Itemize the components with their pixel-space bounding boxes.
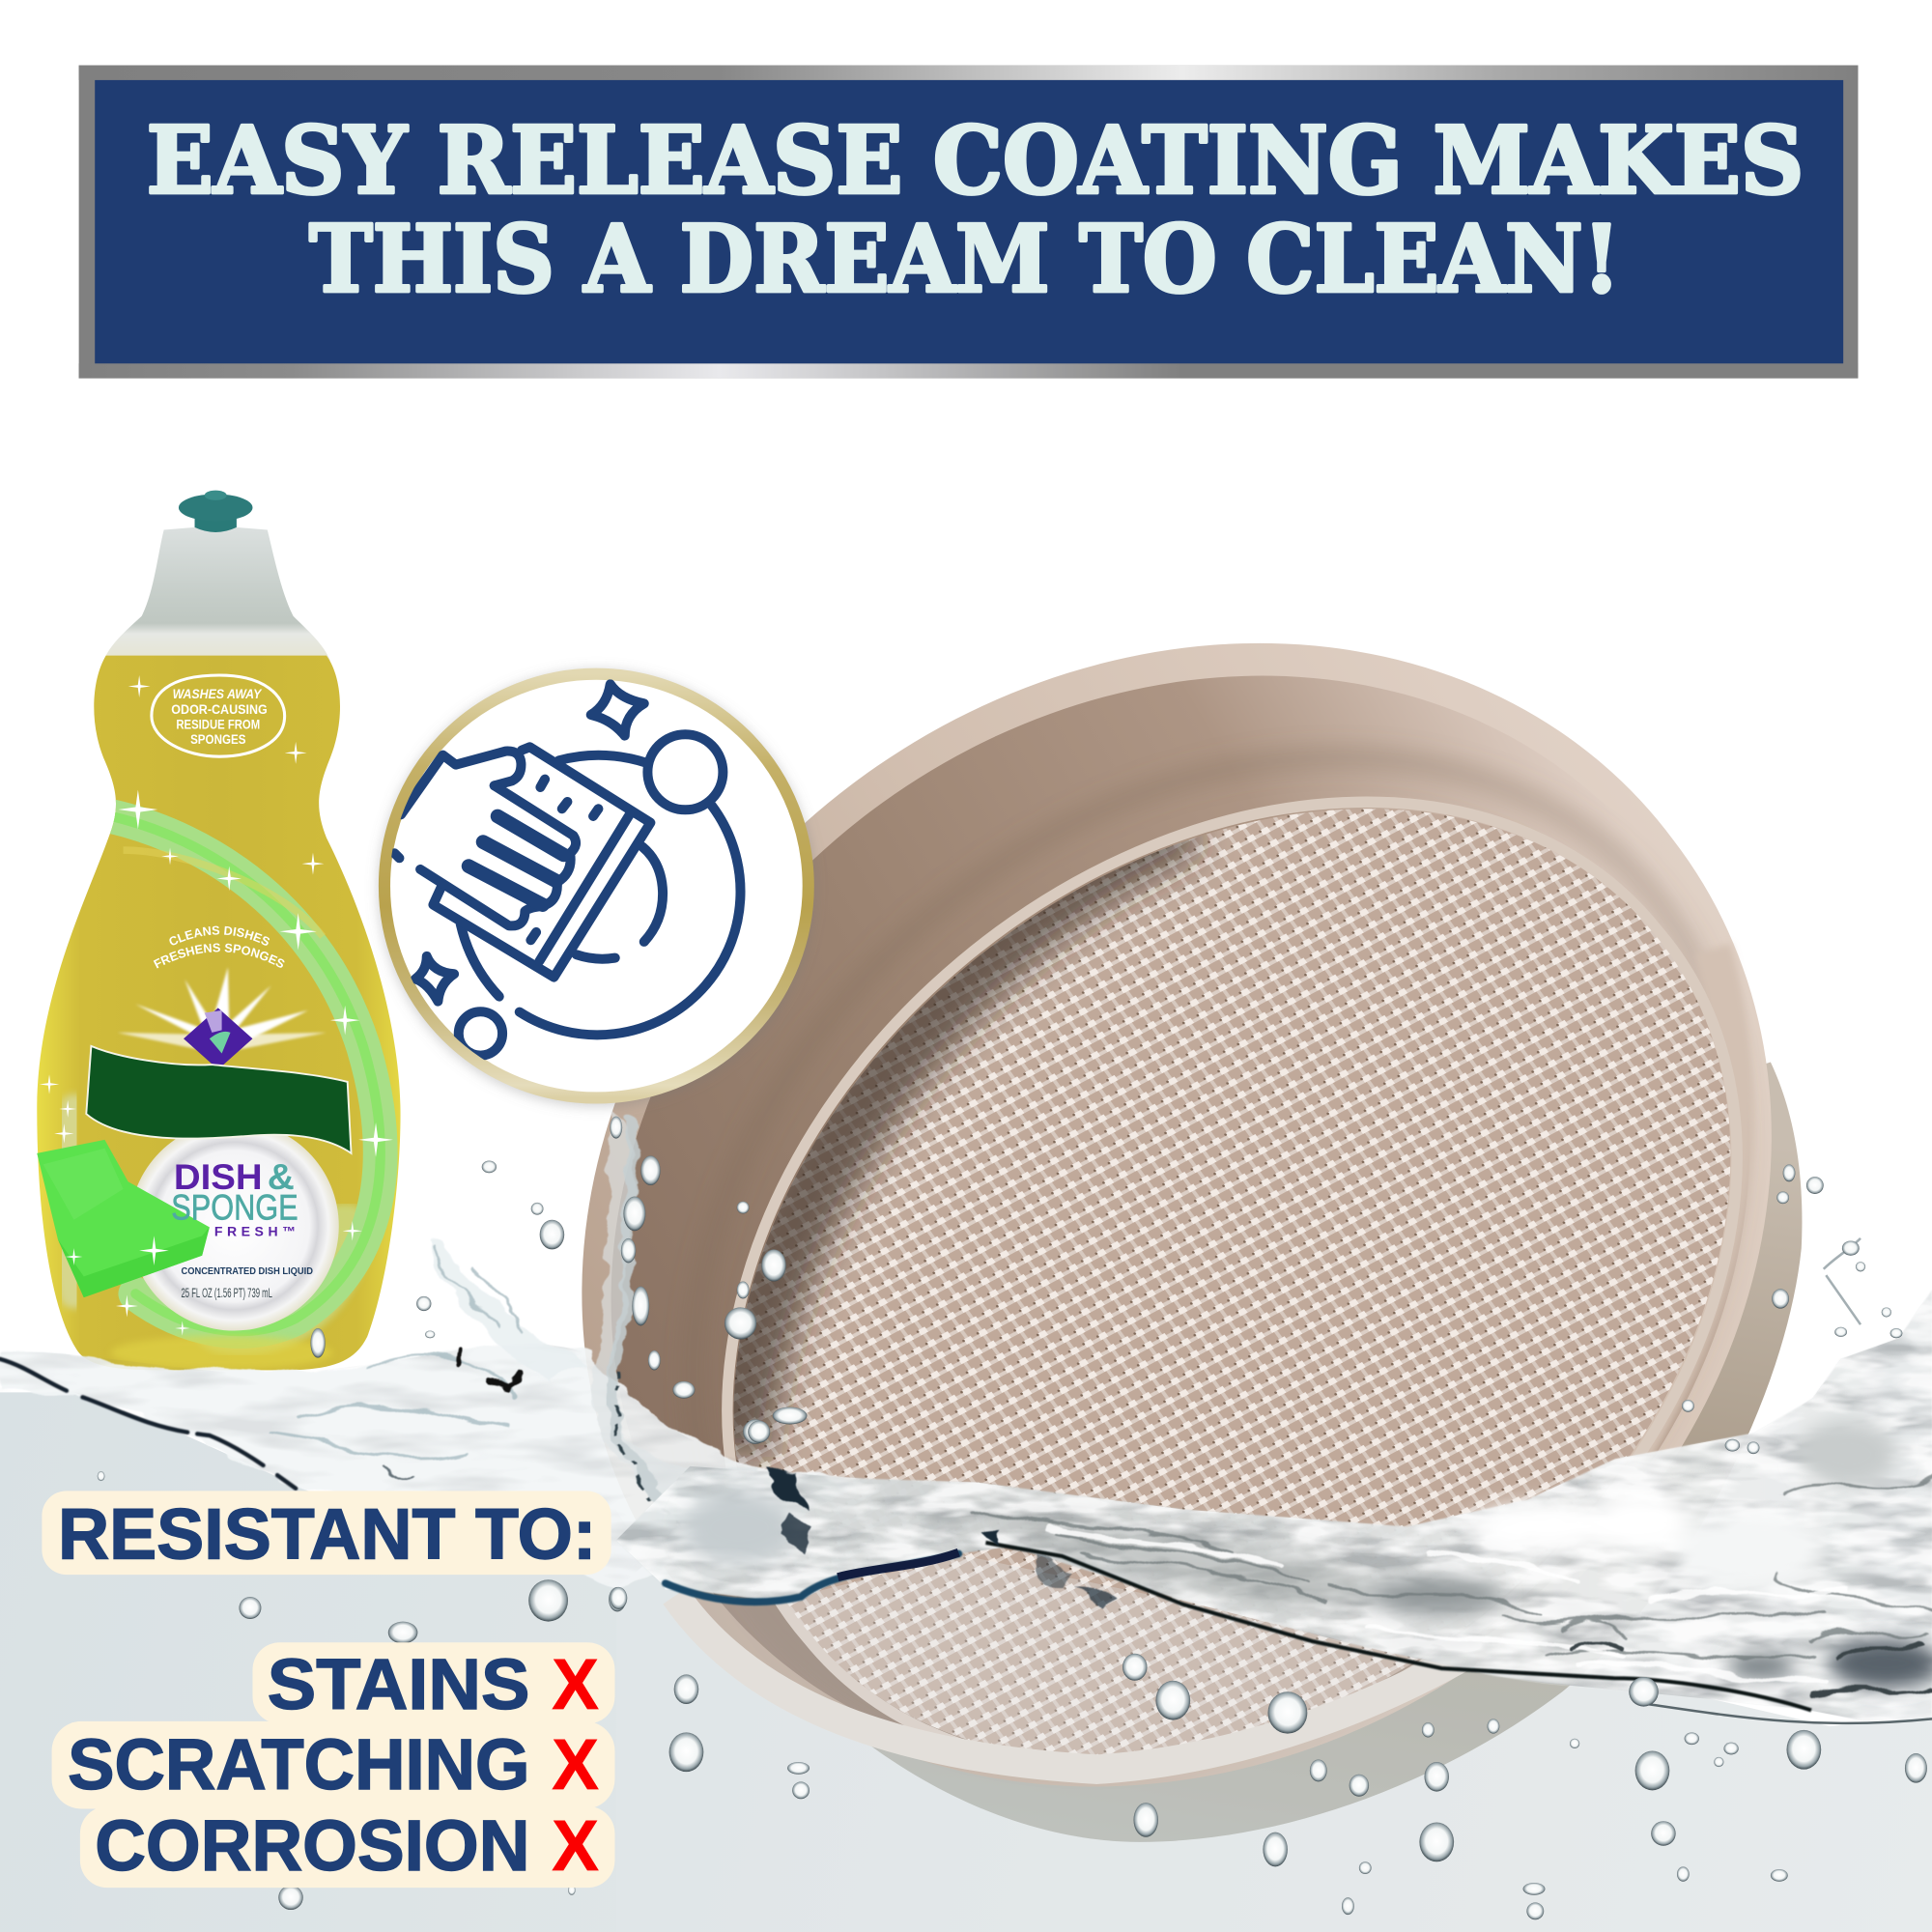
pan inner wall [611, 676, 1749, 1769]
water white mottling [616, 1290, 1932, 1721]
bottle curved claim [153, 925, 284, 968]
pan exterior wall [863, 1062, 1802, 1842]
water splash [0, 1112, 1932, 1723]
water droplets [98, 1117, 1927, 1919]
bottle oval claim [152, 675, 285, 756]
dish soap bottle [37, 491, 401, 1370]
item: scratching: SCRATCHING [68, 1724, 529, 1804]
product name: CONCENTRATED DISH LIQUID [182, 1266, 313, 1277]
submerged rim highlight [675, 1596, 1472, 1770]
water tinted lower background [0, 1392, 1932, 1932]
plume detail strokes [271, 1244, 524, 1480]
sunburst [135, 967, 308, 1047]
water ripples [974, 1479, 1932, 1694]
left water surface [0, 1344, 863, 1589]
title text: EASY RELEASE COATING MAKES [147, 106, 1804, 215]
floor shadow [727, 813, 1182, 1454]
left dark streaks [0, 1359, 296, 1489]
purple diamond logo [184, 1008, 252, 1069]
item: stains: STAINS [268, 1644, 529, 1724]
green swoosh [65, 815, 381, 1331]
bottle oval claim: WASHES AWAY [173, 687, 262, 701]
sparkles [40, 675, 393, 1336]
callout heading: RESISTANT TO: [58, 1494, 596, 1575]
item: stains: X [552, 1644, 599, 1724]
water grey mottling [616, 1290, 1932, 1721]
icon: hand washing a plate with sponge [394, 684, 741, 1056]
bottle neck [103, 527, 330, 661]
resistant to callout [42, 1491, 614, 1888]
product name: FRESH™ [214, 1223, 296, 1238]
callout halo [42, 1491, 614, 1888]
bottle oval claim: SPONGES [190, 732, 246, 747]
water shading [684, 1419, 1932, 1688]
floor ledge [727, 802, 1737, 1766]
submerged tint [616, 1540, 1932, 1932]
title banner [79, 66, 1858, 379]
item: scratching: X [552, 1724, 599, 1804]
bottle highlights [124, 850, 323, 936]
item: corrosion: CORROSION [95, 1805, 529, 1886]
dark green banner [86, 1046, 352, 1153]
bottle oval claim: ODOR-CAUSING [171, 702, 268, 717]
textured floor [734, 809, 1730, 1759]
right rim band [1627, 949, 1734, 1466]
main water band [616, 1290, 1932, 1721]
product name: DISH [174, 1157, 263, 1197]
left surface mottling [0, 1344, 759, 1589]
product name: & [268, 1157, 295, 1197]
bottle curved claim: CLEANS DISHES [169, 925, 270, 946]
circular icon badge [379, 670, 814, 1106]
title text: THIS A DREAM TO CLEAN! [309, 205, 1620, 314]
dark waterline [985, 1543, 1811, 1710]
bottle curved claim: FRESHENS SPONGES [153, 943, 284, 968]
right splash thread [1824, 1238, 1861, 1324]
cake pan [582, 643, 1802, 1842]
bottle cap [179, 491, 252, 533]
title text [147, 106, 1804, 314]
product name: 25 FL OZ (1.56 PT) 739 mL [182, 1286, 272, 1300]
pan edge plume [589, 1112, 759, 1528]
bottle body [37, 656, 401, 1370]
left plume [426, 1237, 589, 1380]
product name [171, 1157, 313, 1300]
sponge [37, 1140, 210, 1297]
wall shade [693, 757, 1735, 1756]
blue water streak [666, 1553, 958, 1602]
bottle oval claim: RESIDUE FROM [176, 717, 260, 731]
plate on bottle [129, 1122, 339, 1331]
product name: SPONGE [171, 1188, 298, 1228]
item: corrosion: X [552, 1805, 599, 1886]
pan rim [582, 643, 1772, 1786]
dark splash patches [766, 1463, 1115, 1608]
